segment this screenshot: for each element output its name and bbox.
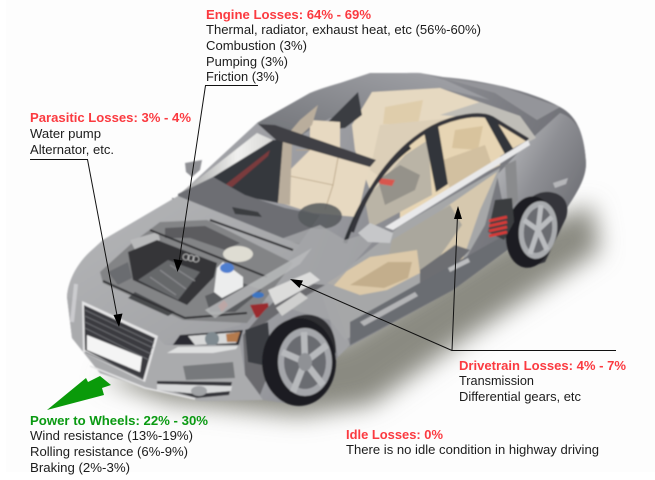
parasitic items: Alternator, etc.	[30, 142, 114, 157]
rear fender	[497, 113, 586, 262]
lower bumper chrome	[90, 366, 195, 399]
floor	[420, 245, 470, 290]
rear strut	[505, 160, 518, 212]
grille surround	[82, 301, 158, 382]
front seat	[278, 120, 370, 217]
arrow: engine leader	[174, 86, 258, 272]
roof	[257, 73, 490, 142]
washer reservoir	[223, 246, 253, 262]
car illustration	[67, 73, 586, 406]
bumper	[67, 297, 263, 401]
sill	[350, 235, 510, 345]
power items: Wind resistance (13%-19%)	[30, 428, 193, 443]
bay clutter	[108, 226, 262, 316]
callout: parasitic losses	[30, 110, 191, 157]
rear seat in window	[452, 126, 483, 150]
engine top stripes	[150, 265, 195, 295]
parasitic items: Water pump	[30, 126, 101, 141]
car body	[67, 73, 586, 405]
drivetrain items	[459, 373, 581, 404]
drivetrain heading: Drivetrain Losses: 4% - 7%	[459, 358, 626, 373]
rear wheel arch	[512, 192, 567, 267]
front wheel arch	[265, 315, 336, 400]
hood strut glass	[205, 248, 312, 318]
idle heading: Idle Losses: 0%	[346, 427, 443, 442]
power items	[30, 428, 193, 475]
rear rim	[515, 199, 561, 261]
dashboard	[178, 177, 320, 243]
blue part	[252, 292, 264, 298]
rear wheel	[501, 193, 561, 271]
belt line	[385, 140, 530, 230]
front rim	[278, 328, 332, 396]
power items: Braking (2%-3%)	[30, 460, 130, 475]
power heading: Power to Wheels: 22% - 30%	[30, 413, 208, 428]
front seat seams	[285, 147, 340, 210]
rear door frame	[352, 115, 528, 232]
rear tyre	[501, 193, 559, 271]
A pillar	[345, 147, 410, 243]
arrow: drivetrain leaders	[290, 206, 616, 350]
rear lower interior	[420, 172, 497, 262]
translucent fender	[250, 225, 385, 357]
red parts	[218, 300, 228, 312]
engine cover	[128, 240, 217, 305]
fog lamp area	[157, 381, 232, 398]
bumper translucent block	[183, 362, 235, 380]
front seat base	[327, 250, 420, 295]
engine bay	[100, 220, 293, 323]
windshield glass	[178, 133, 277, 195]
steering wheel	[298, 203, 342, 229]
right mirror	[358, 223, 393, 243]
callout: drivetrain losses	[459, 358, 626, 404]
engine heading: Engine Losses: 64% - 69%	[206, 7, 371, 22]
engine items: Thermal, radiator, exhaust heat, etc (56%-60%)	[206, 22, 481, 37]
arrow: parasitic leader	[30, 160, 122, 327]
coolant tank	[214, 262, 243, 298]
engine items: Friction (3%)	[206, 69, 279, 84]
rear spokes	[524, 205, 552, 254]
engine items: Pumping (3%)	[206, 54, 288, 69]
engine items	[206, 22, 481, 84]
rear side window	[400, 117, 528, 222]
ground shadow	[100, 205, 600, 416]
red coil spring	[489, 217, 507, 236]
icon: green power arrow	[47, 376, 111, 410]
c pillar glass	[440, 102, 536, 142]
drivetrain items: Transmission	[459, 373, 534, 388]
callout: power to wheels	[30, 413, 208, 475]
audi rings	[183, 254, 199, 262]
parasitic items	[30, 126, 114, 157]
parasitic heading: Parasitic Losses: 3% - 4%	[30, 110, 191, 125]
front tyre	[262, 318, 336, 406]
idle text: There is no idle condition in highway driving	[346, 442, 599, 457]
headlight lower re-draw	[167, 346, 238, 353]
interior machinery	[365, 140, 432, 228]
headlight	[167, 330, 243, 353]
left side highlight	[72, 284, 76, 322]
drivetrain items: Differential gears, etc	[459, 389, 581, 404]
engine mechanicals	[243, 282, 325, 395]
seat belt and pillar	[278, 105, 318, 205]
cabin dark window	[213, 140, 290, 203]
power items: Rolling resistance (6%-9%)	[30, 444, 188, 459]
lower door	[320, 168, 500, 340]
callout: idle losses	[346, 427, 599, 457]
callout: engine losses	[206, 7, 481, 84]
engine items: Combustion (3%)	[206, 38, 307, 53]
grille	[84, 305, 155, 380]
rear headrest	[383, 100, 423, 125]
hood strut bars	[103, 220, 293, 318]
front spokes	[282, 332, 327, 392]
b pillar	[424, 125, 448, 192]
interior: rear cabin	[352, 88, 500, 205]
c pillar	[484, 116, 514, 156]
hood	[67, 196, 300, 345]
grille bars	[85, 310, 154, 379]
trunk lid	[443, 78, 560, 120]
rear seat	[370, 118, 452, 198]
rear marker	[553, 178, 568, 188]
front wheel	[262, 318, 336, 406]
left mirror	[185, 160, 202, 177]
licence plate	[87, 335, 142, 372]
